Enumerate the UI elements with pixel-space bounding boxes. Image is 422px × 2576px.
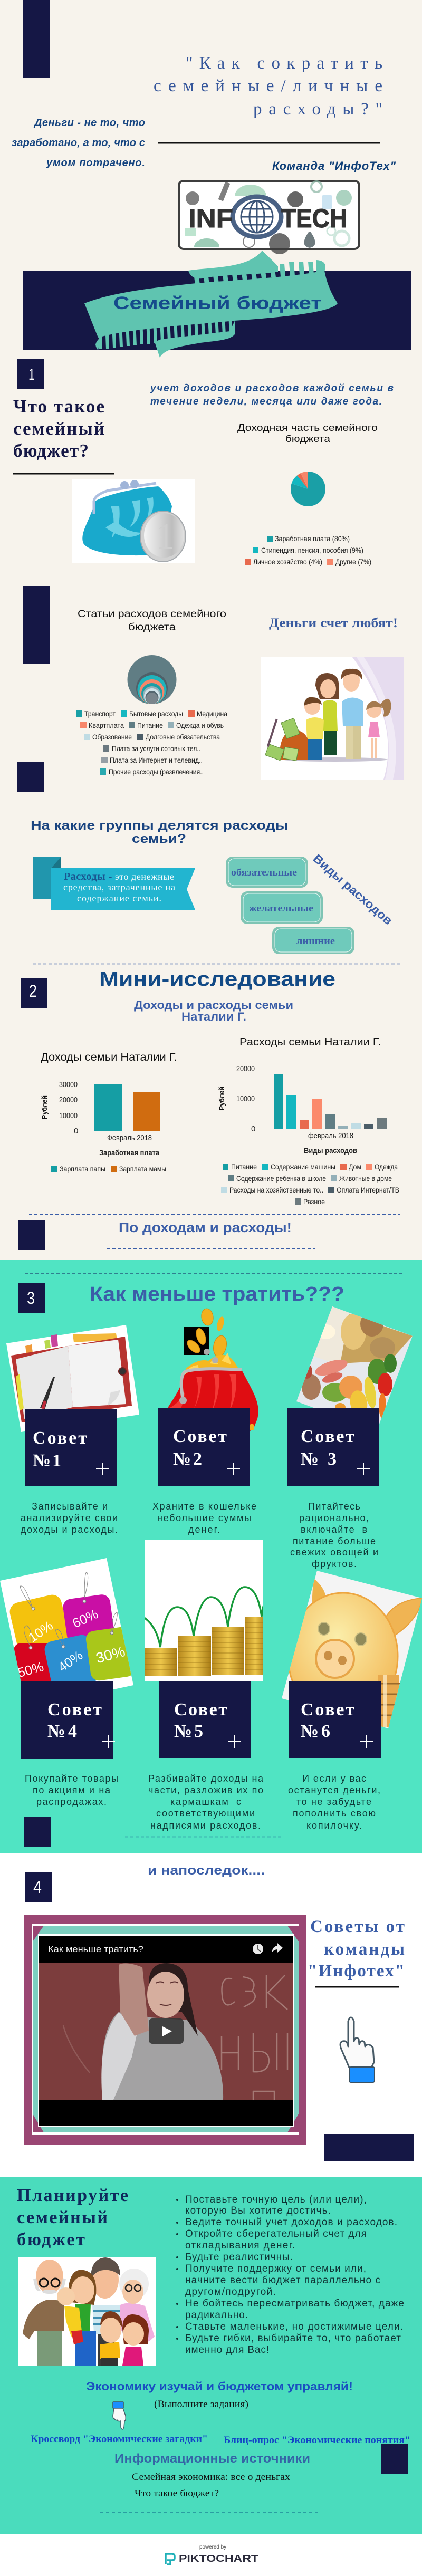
heading: what is family budget: бюджет? [13, 440, 89, 461]
logo background icons [185, 181, 352, 254]
callout: expenses definition: средства, затраченные на [63, 882, 175, 892]
budget tips list: другом/подругой. [185, 2286, 276, 2298]
bar chart: income [40, 1051, 178, 1173]
subheading [134, 998, 293, 1023]
title: расходы?" [253, 100, 382, 119]
image: discount tags: 10% [26, 1618, 56, 1646]
expense legend: Долговые обязательства [146, 733, 220, 741]
heading: plan budget: бюджет [17, 2230, 85, 2250]
budget tips list: Откройте сберегательный счет для [185, 2228, 367, 2239]
tip 6 text: пополнить свою [293, 1808, 376, 1819]
tip card 6 [289, 1681, 381, 1758]
banner [23, 251, 411, 358]
image: piggy bank [280, 1566, 422, 1730]
bar chart: expenses: Дом [349, 1162, 361, 1171]
expense legend: Плата за Интернет и телевид.. [110, 756, 203, 764]
icon: pointing hand down [113, 2402, 126, 2429]
callout: expenses definition: Расходы - это денежные [64, 871, 174, 882]
pie legend: Другие (7%) [335, 558, 371, 566]
expense legend: Плата за услуги сотовых тел.. [112, 744, 200, 753]
image: notebook [6, 1325, 139, 1432]
tip card 1: Совет [33, 1428, 87, 1448]
image: food [296, 1306, 413, 1424]
button: required: обязательные [231, 867, 297, 878]
heading rule [13, 473, 114, 475]
video player [39, 1936, 293, 2126]
bar chart: expenses: Одежда [375, 1162, 398, 1171]
sources list: Семейная экономика: все о деньгах [132, 2472, 291, 2483]
decorative box [17, 762, 44, 792]
bar chart: income: Доходы семьи Наталии Г. [41, 1051, 177, 1063]
image: blue purse with coin: 1 [156, 516, 175, 557]
decorative box [381, 2444, 408, 2474]
expense legend [76, 709, 227, 776]
expense legend: Прочие расходы (развлечения.. [109, 767, 204, 776]
icon: share [272, 1943, 283, 1953]
heading: what is family budget: Что такое [13, 396, 104, 417]
sources list: Что такое бюджет? [135, 2488, 219, 2499]
bar chart: income: Заработная плата [99, 1148, 159, 1157]
ribbon lower left end [95, 338, 100, 350]
bullets [176, 2199, 178, 2340]
title: семейные/личные [154, 76, 382, 95]
expense chart title [78, 609, 226, 633]
image: discount tags: 40% [55, 1648, 85, 1675]
budget tips list: Будьте гибки, выбирайте то, что работает [185, 2333, 401, 2344]
title: "Как сократить [186, 54, 382, 73]
girl [122, 2314, 149, 2344]
budget tips list: именно для Вас! [185, 2344, 269, 2356]
tip card 5: Совет [174, 1700, 227, 1719]
tip card 3 [287, 1408, 379, 1486]
heading: plan budget: Планируйте [17, 2186, 128, 2205]
decorative bar 2 [23, 586, 50, 664]
coin [140, 511, 186, 562]
image: coin stacks [139, 1540, 269, 1681]
tip card 3: № 3 [301, 1449, 337, 1469]
tip card 6: №6 [301, 1722, 330, 1741]
slogan: economy: Экономику изучай и бюджетом управляй! [86, 2380, 353, 2393]
budget tips list: откладывания денег. [185, 2240, 295, 2251]
bar chart: expenses: Питание [231, 1162, 257, 1171]
bar chart: expenses: 10000 [236, 1094, 255, 1103]
pie legend: Стипендия, пенсия, пособия (9%) [261, 546, 363, 554]
bar chart: income: 20000 [59, 1095, 78, 1104]
tip card 2 [158, 1408, 250, 1486]
tip 5 text: части, разложив их по [148, 1785, 263, 1795]
budget tips list: Будьте реалистичны. [185, 2252, 293, 2263]
bar chart: income: Зарплата мамы [119, 1165, 166, 1173]
ribbon upper right end [316, 260, 325, 273]
expense legend: Транспорт [84, 709, 116, 718]
heading: how to spend less: Как меньше тратить??? [90, 1283, 344, 1305]
image: discount tags: 30% [94, 1643, 127, 1666]
definition text: течение недели, месяца или даже года. [150, 396, 382, 407]
section number 4 [25, 1872, 52, 1902]
image: family with money [261, 657, 404, 780]
header decorative bar [23, 0, 50, 78]
tip 3 text: фруктов. [312, 1559, 357, 1569]
expense legend: Медицина [197, 709, 227, 718]
tip card 5: №5 [174, 1722, 203, 1741]
callout: expenses definition: содержание семьи. [77, 893, 161, 903]
team name: Команда "ИнфоТех" [272, 159, 396, 172]
callout: expenses definition [33, 857, 195, 910]
tip 3 text [290, 1501, 378, 1569]
tip 1 text: анализируйте свои [21, 1513, 118, 1523]
logo wordmark: INF [188, 204, 233, 233]
decorative dark rectangle [324, 2134, 414, 2161]
tip card 1 [25, 1409, 117, 1486]
tip card 5 [159, 1681, 251, 1758]
expense legend: Квартплата [89, 721, 124, 729]
tip 3 text: Питайтесь [308, 1501, 360, 1512]
income chart title: бюджета [285, 434, 331, 444]
heading: expense groups [31, 819, 288, 846]
definition text: учет доходов и расходов каждой семьи в [150, 383, 394, 394]
task note: (Выполните задания) [154, 2399, 248, 2410]
image: red purse with coins [164, 1308, 258, 1432]
bar chart: expenses: Рублей [217, 1087, 226, 1110]
tip 6 text: копилочку. [306, 1820, 362, 1831]
button: excess: лишние [296, 936, 335, 947]
heading: mini research: Мини-исследование [99, 968, 335, 991]
tip 3 text: свежих овощей и [290, 1547, 378, 1558]
pie chart: income [291, 472, 325, 506]
bar chart: expenses: Оплата Интернет/ТВ [337, 1186, 399, 1194]
tip 5 text: Разбивайте доходы на [148, 1773, 264, 1784]
bar chart: expenses: февраль 2018 [308, 1131, 353, 1140]
expense chart title: Статьи расходов семейного [78, 609, 226, 620]
budget tips list: Ставьте маленькие, но достижимые цели. [185, 2321, 403, 2332]
footer credit: powered by [199, 2544, 226, 2550]
income chart title: Доходная часть семейного [237, 422, 378, 433]
video player: Как меньше тратить? [48, 1944, 143, 1954]
tip card 2: №2 [173, 1449, 202, 1469]
bar chart: income: 10000 [59, 1111, 78, 1120]
baby [64, 2306, 82, 2337]
image: discount tags: 50% [16, 1659, 45, 1680]
subheading: Наталии Г. [181, 1010, 246, 1023]
white video background [0, 1853, 422, 2177]
expense chart title: бюджета [128, 622, 176, 633]
tip 6 text [288, 1773, 380, 1831]
heading: what is family budget: семейный [13, 418, 104, 439]
tip 5 text: надписями расходов. [150, 1820, 261, 1831]
title [154, 54, 382, 119]
decorative box [18, 1220, 45, 1250]
ribbon upper tab [188, 251, 278, 278]
tip card 2: Совет [173, 1427, 227, 1446]
pie legend: Заработная плата (80%) [275, 534, 350, 543]
heading: expense groups: семьи? [132, 832, 186, 846]
expense legend: Одежда и обувь [176, 721, 224, 729]
tip 4 text: Покупайте товары [25, 1773, 118, 1784]
boy [100, 2342, 120, 2359]
bar chart: expenses: 20000 [236, 1064, 255, 1073]
expense legend: Образование [92, 733, 132, 741]
mom [324, 729, 337, 755]
teal tips background [0, 1260, 422, 1853]
button: required [226, 857, 308, 888]
footer background [0, 2534, 422, 2576]
definition text [150, 383, 394, 407]
tip 3 text: питание больше [293, 1536, 376, 1546]
budget tips list: Получите поддержку от семьи или, [185, 2263, 366, 2274]
heading: sources: Информационные источники [114, 2452, 310, 2466]
heading: what is family budget [13, 396, 104, 461]
heading: team advice: "Инфотех" [308, 1962, 405, 1981]
rotated label: expense types: Виды расходов [311, 851, 395, 927]
tip 4 text: распродажах. [36, 1796, 107, 1807]
girl [371, 738, 373, 758]
heading: team advice [308, 1917, 405, 1981]
tip 2 text: денег. [188, 1524, 220, 1535]
budget tips list [176, 2194, 404, 2356]
logo: InfoTech: TECH [281, 204, 347, 233]
logo: InfoTech [179, 181, 359, 254]
logo globe ring [233, 197, 281, 237]
ribbon lower stripes [98, 314, 233, 349]
tip 4 text [25, 1773, 118, 1807]
tip card 6: Совет [301, 1700, 354, 1719]
bar chart: expenses: Расходы семьи Наталии Г. [239, 1036, 381, 1048]
budget tips list: Не бойтесь пересматривать бюджет, даже [185, 2298, 404, 2309]
bar chart: income: Рублей [40, 1095, 49, 1119]
budget tips list: радикально. [185, 2310, 248, 2321]
tip 6 text: останутся деньги, [288, 1785, 380, 1795]
tip 1 text: доходы и расходы. [21, 1524, 118, 1535]
quote [12, 117, 145, 169]
sources list [132, 2472, 291, 2499]
bar chart: expenses: Содержание ребенка в школе [236, 1174, 326, 1183]
tip 6 text: то не забудьте [296, 1796, 371, 1807]
tip 5 text: кармашкам с [170, 1796, 241, 1807]
heading: plan budget [17, 2186, 128, 2250]
boy [308, 737, 322, 760]
bar chart: expenses: Расходы на хозяйственные то.. [229, 1186, 323, 1194]
button: desirable [241, 891, 323, 924]
cream background [0, 0, 422, 1260]
bar chart: expenses: 0 [251, 1124, 255, 1133]
expense legend: Питание [137, 721, 163, 729]
icon: Piktochart logo [166, 2554, 175, 2564]
link: quiz: Блиц-опрос "Экономические понятия" [224, 2435, 410, 2446]
tip card 3: Совет [301, 1427, 354, 1446]
link: crossword: Кроссворд "Экономические загадки" [31, 2434, 208, 2445]
tip 5 text: соответствующими [156, 1808, 255, 1819]
bar chart: expenses [217, 1036, 403, 1206]
section number 4: 4 [33, 1878, 42, 1897]
tip 4 text: по акциям и на [33, 1785, 111, 1795]
heading: team advice: команды [324, 1940, 405, 1959]
icon: clock [253, 1944, 263, 1954]
heading: team advice: Советы от [310, 1917, 405, 1936]
section number 3 [18, 1283, 45, 1313]
tip 5 text [148, 1773, 264, 1831]
button: desirable: желательные [249, 903, 313, 914]
section number 3: 3 [27, 1289, 35, 1308]
budget tips list: начните вести бюджет параллельно с [185, 2275, 380, 2286]
budget tips list: которую Вы хотите достичь. [185, 2205, 331, 2216]
heading: expense groups: На какие группы делятся расходы [31, 819, 288, 833]
section number 2 [21, 978, 47, 1008]
ribbon upper stripes [194, 262, 323, 285]
tip 3 text: включайте в [301, 1524, 367, 1535]
section number 1 [17, 359, 44, 389]
expense legend: Бытовые расходы [129, 709, 183, 718]
bar chart: expenses: Виды расходов [304, 1146, 357, 1155]
bar chart: expenses: Содержание машины [271, 1162, 335, 1171]
bar chart: expenses: Животные в доме [339, 1174, 392, 1183]
heading: finally: и напоследок.... [148, 1863, 265, 1878]
ribbon main [84, 271, 338, 338]
section number 2: 2 [29, 982, 37, 1001]
tip 1 text: Записывайте и [32, 1501, 108, 1512]
footer credit [166, 2544, 258, 2564]
grandpa [37, 2330, 62, 2366]
income chart title [237, 422, 378, 444]
budget tips list: Ведите точный учет доходов и расходов. [185, 2217, 397, 2228]
image: big family [18, 2257, 156, 2366]
image: blue purse with coin [72, 479, 195, 563]
bar chart: income: Зарплата папы [60, 1165, 106, 1173]
bar chart: income: Февраль 2018 [107, 1133, 152, 1142]
tip 2 text: небольшие суммы [157, 1513, 251, 1523]
video frame [24, 1915, 306, 2145]
pie legend [245, 534, 371, 566]
video still [39, 1963, 293, 2100]
tip 2 text [152, 1501, 256, 1535]
banner heading: Семейный бюджет [113, 293, 322, 313]
heading: plan budget: семейный [17, 2208, 108, 2227]
tip card 1: №1 [33, 1451, 61, 1470]
image: discount tags: 60% [70, 1607, 100, 1631]
grandma [120, 2303, 155, 2342]
decorative box [24, 1817, 51, 1847]
slogan: По доходам и расходы! [119, 1219, 292, 1235]
tip 3 text: рационально, [299, 1513, 369, 1523]
budget tips list: Поставьте точную цель (или цели), [185, 2194, 367, 2205]
bar chart: income: 0 [74, 1127, 78, 1136]
icon: pointing hand up [340, 2017, 375, 2082]
tip 2 text: Храните в кошельке [152, 1501, 256, 1512]
bar chart: income: 30000 [59, 1080, 78, 1089]
quote: Деньги - не то, что [33, 117, 145, 129]
nested circle chart: expenses [128, 655, 176, 704]
mom [75, 2331, 96, 2366]
tip card 4 [21, 1681, 115, 1759]
quote: умом потрачено. [46, 157, 145, 169]
teal planning background [0, 2177, 422, 2534]
bar chart: expenses: Разное [303, 1197, 325, 1206]
money bag [280, 730, 308, 760]
section number 1: 1 [28, 365, 35, 383]
subheading: Доходы и расходы семьи [134, 998, 293, 1012]
image: discount tags [0, 1558, 133, 1690]
tip card 4: Совет [47, 1700, 102, 1719]
button: excess [272, 927, 354, 954]
title divider [158, 142, 380, 143]
tip 1 text [21, 1501, 118, 1535]
tip 6 text: И если у вас [302, 1773, 366, 1784]
money motto: Деньги счет любят! [269, 616, 398, 630]
play button [149, 2018, 184, 2044]
pie legend: Личное хозяйство (4%) [253, 558, 322, 566]
quote: заработано, а то, что с [12, 137, 145, 149]
heading rule [315, 1986, 399, 1987]
ribbon lower tail [155, 320, 235, 358]
dad [98, 2331, 114, 2366]
tip card 4: №4 [47, 1722, 77, 1741]
dad [346, 724, 353, 759]
footer credit: PIKTOCHART [179, 2553, 258, 2564]
